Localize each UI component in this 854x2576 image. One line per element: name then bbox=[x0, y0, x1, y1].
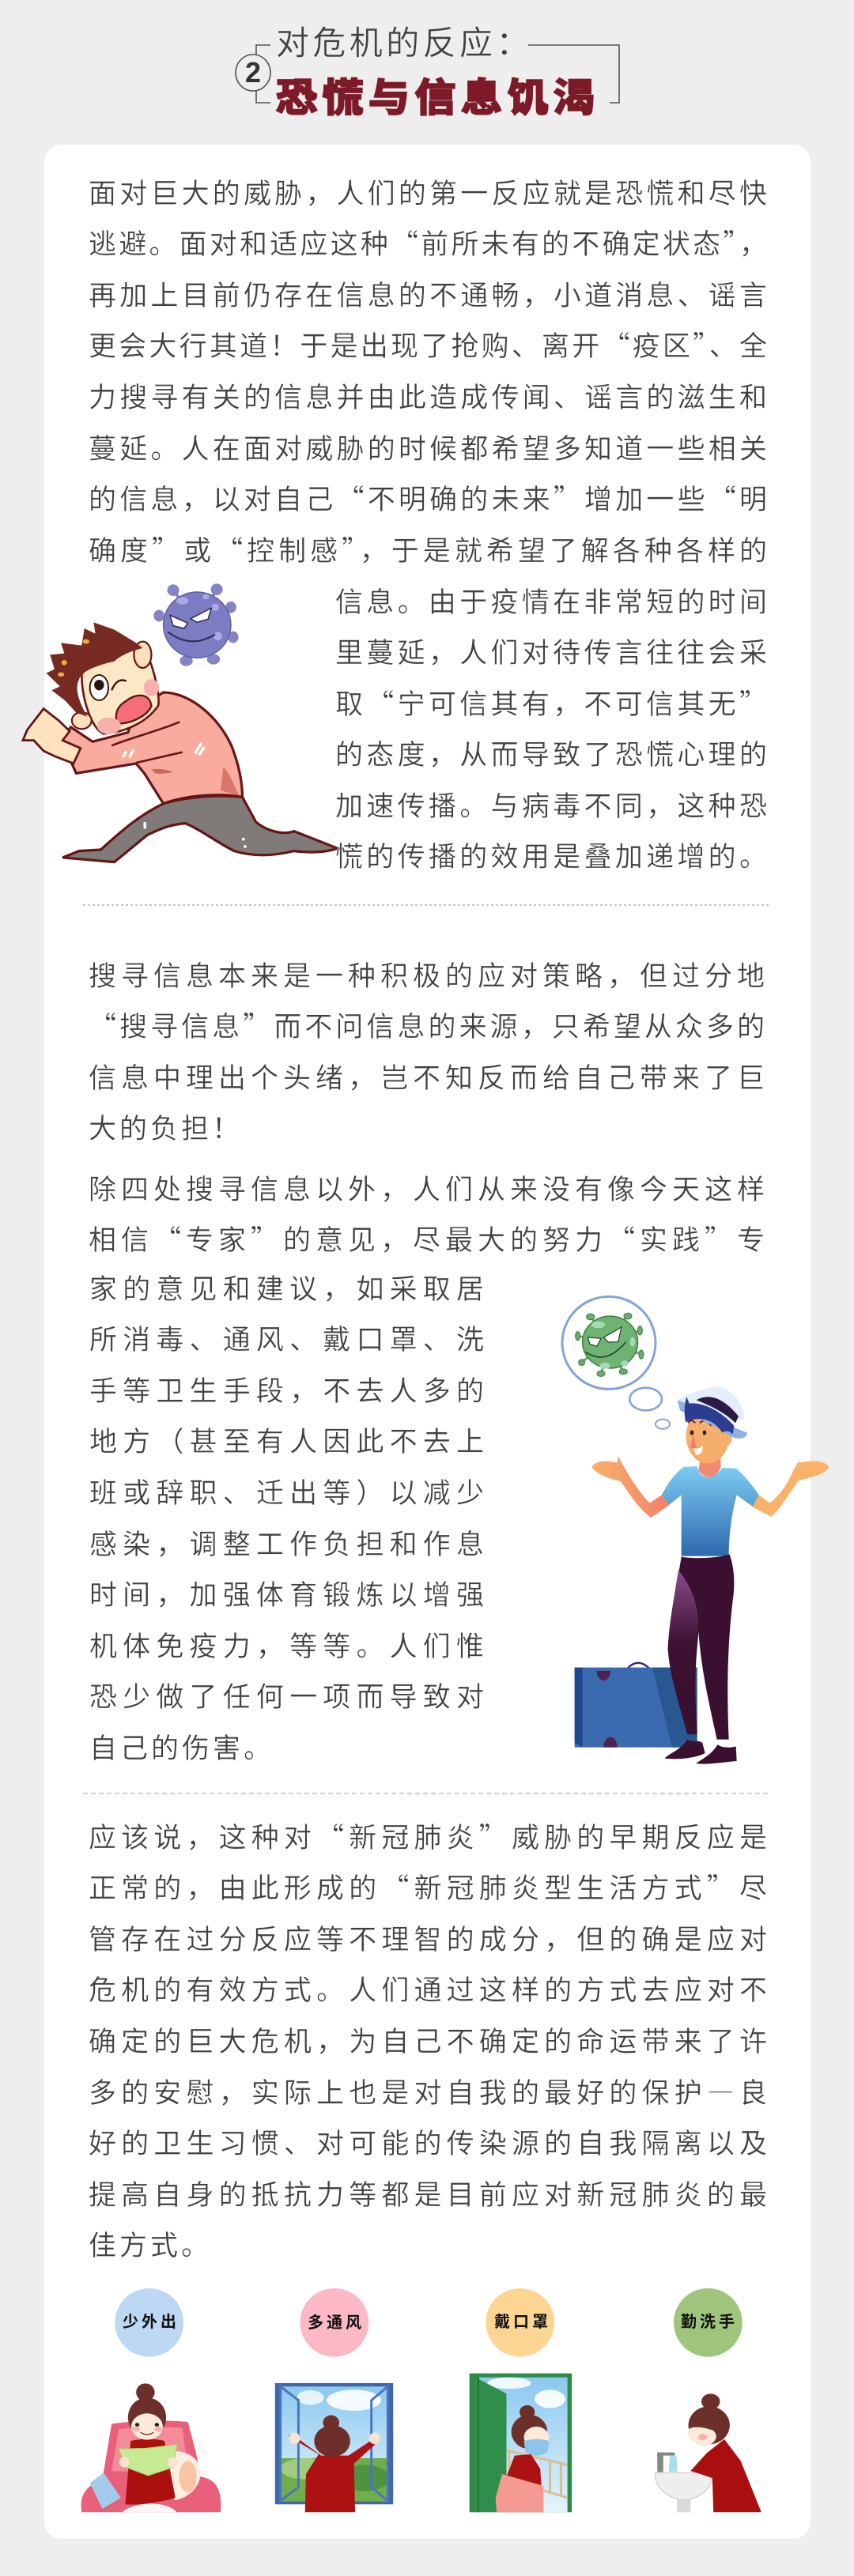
illustration: shrugging man with suitcase bbox=[562, 1296, 829, 1764]
text block: paragraph 1 full width: 逃避。面对和适应这种“前所未有的不确定状态”， bbox=[89, 222, 767, 262]
text block: paragraph 1 full width: 的信息，以对自己“不明确的未来”增加一些“明 bbox=[89, 477, 767, 518]
illustration row: four healthy habits bbox=[81, 2288, 761, 2512]
man: eyes and mouth bbox=[90, 675, 108, 700]
figure: woman opening window bbox=[275, 2383, 393, 2512]
text block: paragraph 4 bbox=[89, 1816, 767, 2264]
divider: top bbox=[83, 904, 771, 906]
heading: line one: 对危机的反应： bbox=[276, 17, 533, 65]
man: trousers bbox=[62, 796, 338, 862]
text block: paragraph 3 beside illustration: 自己的伤害。 bbox=[89, 1726, 274, 1767]
text block: paragraph 2: 信息中理出个头绪，岂不知反而给自己带来了巨 bbox=[89, 1056, 765, 1096]
text block: paragraph 2 bbox=[89, 954, 765, 1147]
man: shoes bbox=[665, 1740, 737, 1764]
icon: purple virus bbox=[155, 585, 237, 665]
man: hat and hair bbox=[678, 1386, 747, 1439]
text block: paragraph 3 beside illustration: 手等卫生手段，不去人多的 bbox=[89, 1369, 484, 1409]
label: ventilation: 多通风 bbox=[308, 2314, 365, 2332]
figure: woman washing hands at sink bbox=[655, 2393, 761, 2512]
text block: paragraph 1 beside illustration: 里蔓延，人们对待传言往往会采 bbox=[335, 631, 767, 671]
text block: paragraph 4: 好的卫生习惯、对可能的传染源的自我隔离以及 bbox=[89, 2122, 767, 2162]
text block: paragraph 3 beside illustration: 恐少做了任何一项而导致对 bbox=[89, 1675, 484, 1715]
text block: paragraph 1 full width: 确度”或“控制感”，于是就希望了解各种各样的 bbox=[89, 529, 767, 569]
text block: paragraph 4: 正常的，由此形成的“新冠肺炎型生活方式”尽 bbox=[89, 1866, 767, 1907]
text block: paragraph 2: “搜寻信息”而不问信息的来源，只希望从众多的 bbox=[89, 1005, 765, 1045]
text block: paragraph 1 full width: 更会大行其道！于是出现了抢购、离开“疫区”、全 bbox=[89, 324, 767, 364]
text block: paragraph 4: 应该说，这种对“新冠肺炎”威胁的早期反应是 bbox=[89, 1816, 767, 1856]
text block: paragraph 1 beside illustration: 取“宁可信其有，不可信其无” bbox=[335, 682, 767, 722]
text block: paragraph 3 beside illustration: 机体免疫力，等等。人们惟 bbox=[89, 1624, 484, 1665]
text block: paragraph 1 beside illustration: 加速传播。与病毒不同，这种恐 bbox=[335, 784, 767, 824]
man: face bbox=[81, 647, 159, 734]
text block: paragraph 2: 大的负担！ bbox=[89, 1107, 243, 1147]
man: hand bbox=[23, 709, 81, 764]
text block: paragraph 4: 佳方式。 bbox=[89, 2223, 212, 2264]
text block: paragraph 3 beside illustration: 地方（甚至有人因此不去上 bbox=[89, 1420, 484, 1460]
label: wash hands: 勤洗手 bbox=[681, 2314, 738, 2331]
illustration: panicked running man with purple virus bbox=[23, 585, 338, 862]
man: shine marks bbox=[123, 743, 245, 848]
heading: line two: 恐慌与信息饥渴 bbox=[276, 66, 600, 123]
text block: paragraph 1 full width: 力搜寻有关的信息并由此造成传闻、谣言的滋生和 bbox=[89, 375, 767, 416]
text block: paragraph 4: 危机的有效方式。人们通过这样的方式去应对不 bbox=[89, 1968, 767, 2008]
section number: 2 bbox=[245, 56, 261, 89]
text block: paragraph 3 beside illustration bbox=[89, 1267, 484, 1767]
badge: ventilation bbox=[300, 2288, 368, 2357]
divider: middle bbox=[83, 1793, 771, 1794]
title bracket frame bbox=[236, 45, 619, 103]
badge: wash hands bbox=[674, 2288, 743, 2357]
text block: paragraph 3 full width: 相信“专家”的意见，尽最大的努力“实践”专 bbox=[89, 1218, 765, 1258]
text block: paragraph 4: 多的安慰，实际上也是对自我的最好的保护—良 bbox=[89, 2071, 767, 2111]
figure: woman reading in armchair bbox=[81, 2383, 221, 2512]
text block: paragraph 3 beside illustration: 时间，加强体育锻炼以增强 bbox=[89, 1573, 484, 1613]
text block: paragraph 3 beside illustration: 家的意见和建议，如采取居 bbox=[89, 1267, 484, 1307]
man: trousers bbox=[668, 1554, 734, 1740]
text block: paragraph 4: 确定的巨大危机，为自己不确定的命运带来了许 bbox=[89, 2020, 767, 2060]
text block: paragraph 1 full width: 面对巨大的威胁，人们的第一反应就是恐慌和尽快 bbox=[89, 172, 767, 212]
text block: paragraph 1 beside illustration: 信息。由于疫情在非常短的时间 bbox=[335, 580, 767, 620]
text block: paragraph 1 beside illustration bbox=[335, 580, 767, 875]
man: arms bbox=[591, 1457, 670, 1518]
text block: paragraph 2: 搜寻信息本来是一种积极的应对策略，但过分地 bbox=[89, 954, 765, 994]
thought bubble with green virus bbox=[562, 1296, 670, 1429]
text block: paragraph 1 beside illustration: 慌的传播的效用是叠加递增的。 bbox=[335, 835, 767, 875]
label: stay home: 少外出 bbox=[123, 2314, 179, 2331]
text block: paragraph 1 full width: 再加上目前仍存在信息的不通畅，小道消息、谣言 bbox=[89, 273, 767, 314]
text block: paragraph 1 full width: 蔓延。人在面对威胁的时候都希望多知道一些相关 bbox=[89, 427, 767, 467]
figure: woman with mask at door bbox=[470, 2374, 572, 2512]
badge: wear mask bbox=[486, 2288, 554, 2357]
badge: stay home bbox=[115, 2288, 183, 2357]
label: wear mask: 戴口罩 bbox=[494, 2314, 551, 2331]
man: neck and head bbox=[698, 1443, 721, 1477]
text block: paragraph 3 beside illustration: 感染，调整工作负担和作息 bbox=[89, 1522, 484, 1563]
text block: paragraph 4: 提高自身的抵抗力等都是目前应对新冠肺炎的最 bbox=[89, 2173, 767, 2213]
text block: paragraph 1 beside illustration: 的态度，从而导致了恐慌心理的 bbox=[335, 733, 767, 773]
text block: paragraph 3 beside illustration: 所消毒、通风、戴口罩、洗 bbox=[89, 1318, 484, 1358]
icon: green virus bbox=[576, 1313, 644, 1376]
text block: paragraph 3 full width: 除四处搜寻信息以外，人们从来没有像今天这样 bbox=[89, 1167, 765, 1208]
suitcase bbox=[575, 1663, 697, 1748]
text block: paragraph 3 beside illustration: 班或辞职、迁出等）以减少 bbox=[89, 1471, 484, 1511]
text block: paragraph 4: 管存在过分反应等不理智的成分，但的确是应对 bbox=[89, 1918, 767, 1958]
man: spiky hair bbox=[47, 622, 142, 717]
text block: paragraph 3 full width bbox=[89, 1167, 765, 1258]
text block: paragraph 1 full width bbox=[89, 172, 767, 569]
man: pink sweater bbox=[61, 692, 242, 804]
man: blue t-shirt bbox=[662, 1466, 759, 1556]
